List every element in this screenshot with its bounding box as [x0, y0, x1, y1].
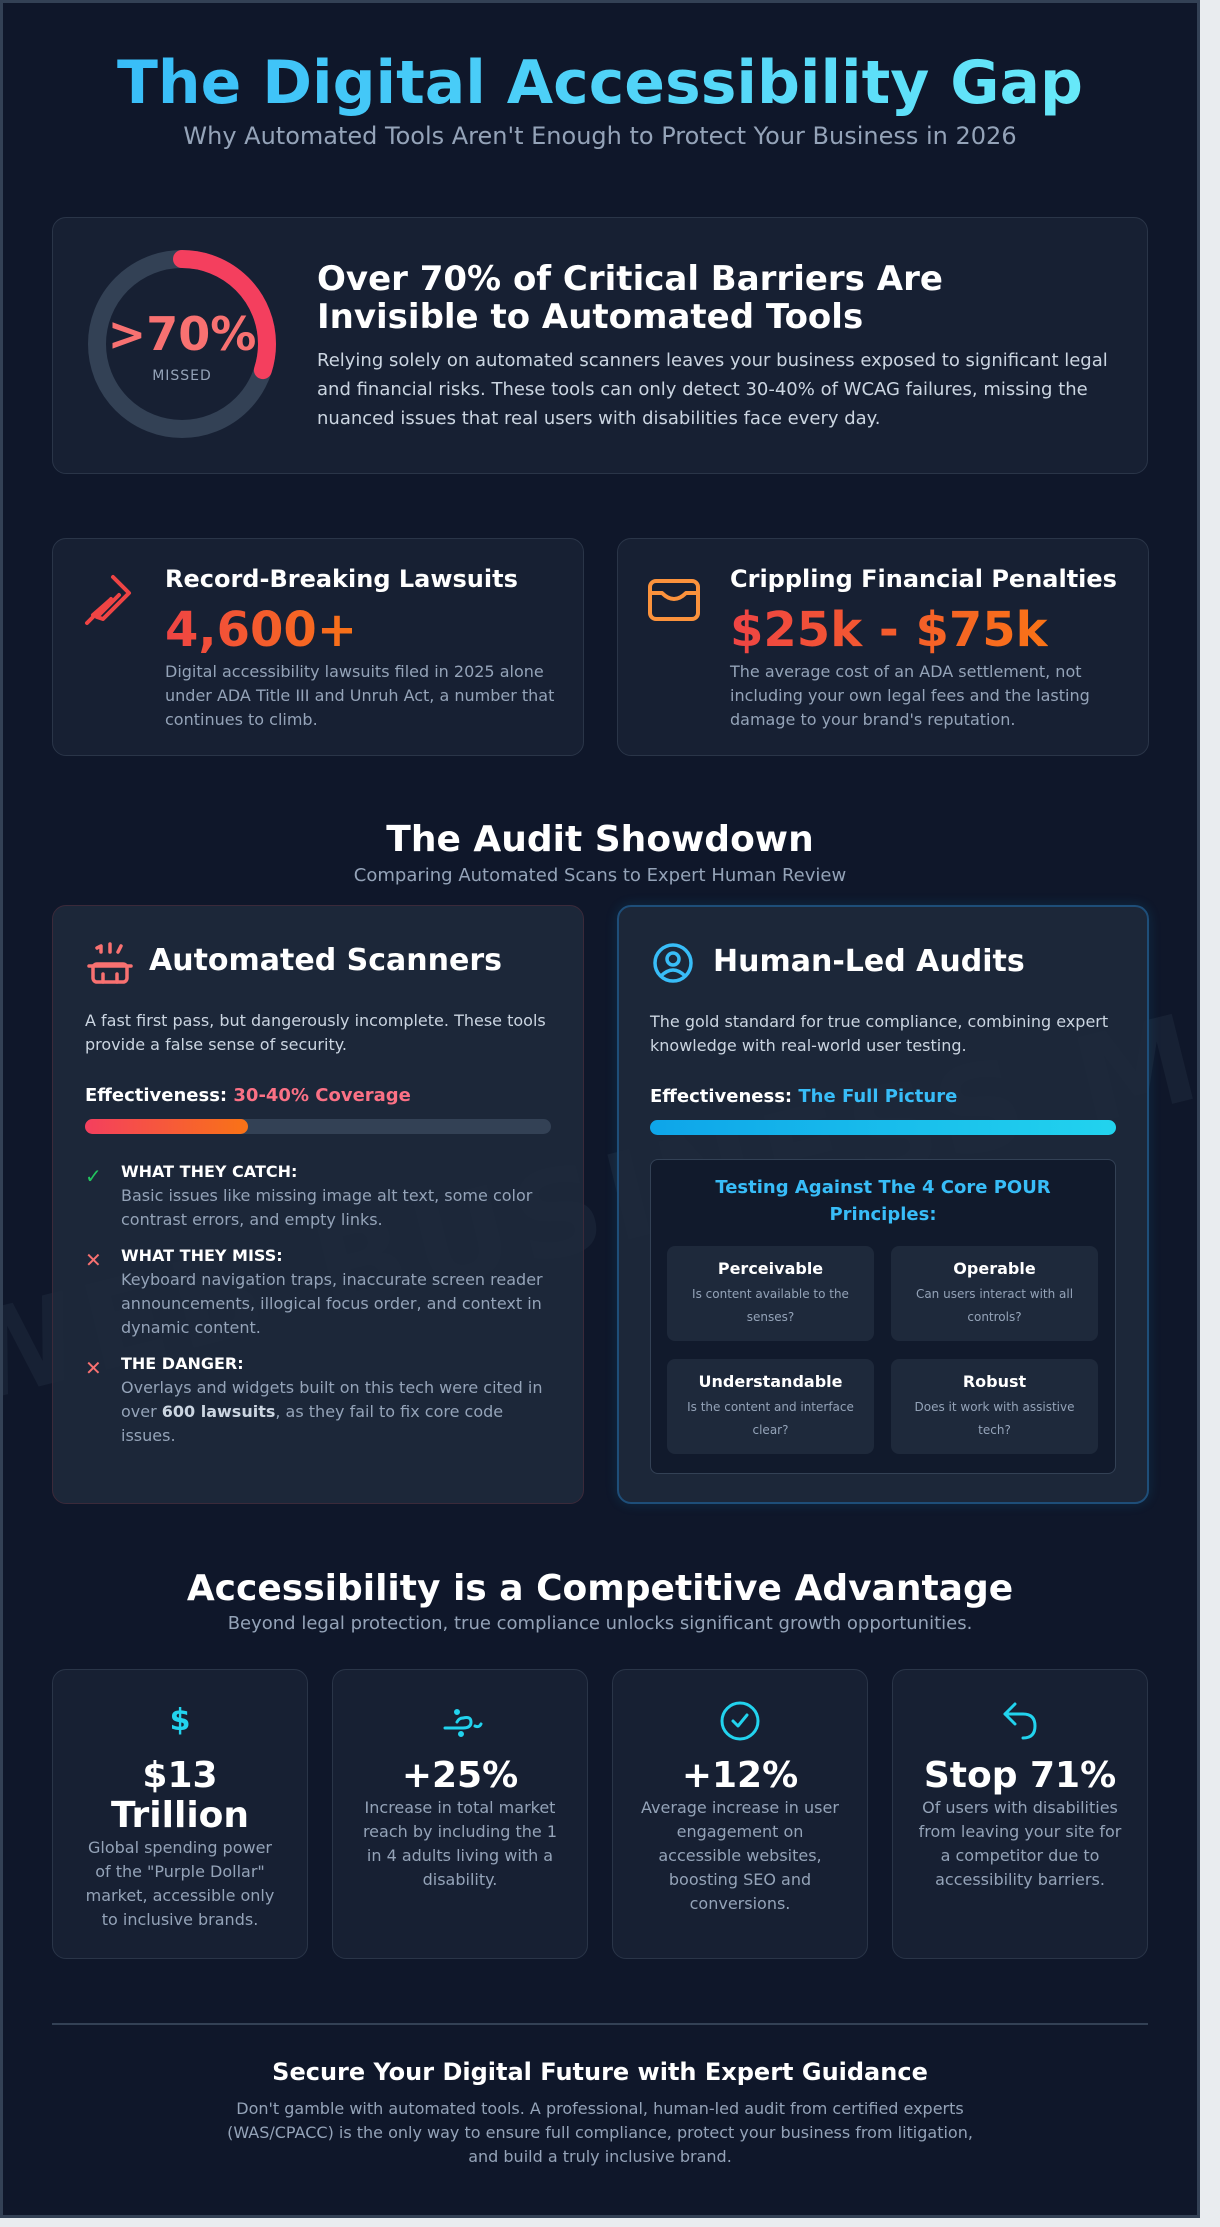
- penalties text: The average cost of an ADA settlement, not including your own legal fees and the lasting damage to your brand's reputation.: [730, 662, 1090, 729]
- list: the danger: Overlays and widgets built on this tech were cited in over 600 lawsuits, as they fail to fix core code issues.: [121, 1378, 542, 1445]
- panel: human-led audits: [617, 905, 1149, 1504]
- panel: hero stat: [52, 217, 1148, 474]
- icon: robot: [87, 942, 133, 984]
- hero heading: Over 70% of Critical Barriers Are: [317, 259, 943, 299]
- bar: scanners effectiveness: [85, 1119, 551, 1134]
- list: what they catch: Basic issues like missing image alt text, some color contrast errors, and empty links.: [121, 1186, 532, 1229]
- stat card: engagement: +12%: [682, 1755, 798, 1796]
- list: what they miss: WHAT THEY MISS:: [121, 1246, 283, 1265]
- lawsuits title: Record-Breaking Lawsuits: [165, 565, 518, 593]
- icon: return arrow: [1003, 1702, 1036, 1740]
- footer heading: Secure Your Digital Future with Expert Guidance: [272, 2058, 928, 2086]
- heading: competitive advantage: Accessibility is a Competitive Advantage: [187, 1568, 1013, 1609]
- icon: dollar: $: [170, 1703, 190, 1738]
- panel: POUR principles: [650, 1159, 1116, 1474]
- scanners effectiveness label: Effectiveness: 30-40% Coverage: [85, 1085, 411, 1106]
- hero heading: Invisible to Automated Tools: [317, 297, 863, 337]
- principle: operable: Can users interact with all controls?: [916, 1287, 1073, 1324]
- principle: robust: Robust: [963, 1372, 1026, 1391]
- list: what they catch: [85, 1162, 532, 1229]
- principle: perceivable: Is content available to the senses?: [692, 1287, 849, 1324]
- penalties title: Crippling Financial Penalties: [730, 565, 1117, 593]
- footer text: Don't gamble with automated tools. A professional, human-led audit from certified experts (WAS/CPACC) is the only way to ensure full compliance, protect your business from litigation, and build a truly inclusive brand.: [227, 2099, 973, 2166]
- stat card: engagement: Average increase in user engagement on accessible websites, boosting SEO and conversions.: [641, 1798, 839, 1913]
- subtitle: Why Automated Tools Aren't Enough to Protect Your Business in 2026: [183, 122, 1017, 150]
- principle: understandable: Understandable: [698, 1372, 842, 1391]
- stat card: purple dollar: Global spending power of the "Purple Dollar" market, accessible only to inclusive brands.: [86, 1838, 274, 1929]
- stat card: purple dollar: $13: [142, 1755, 218, 1796]
- stat card: engagement: [612, 1669, 868, 1959]
- list: the danger: THE DANGER:: [121, 1354, 244, 1373]
- principle: understandable: [667, 1359, 874, 1454]
- stat card: retention: [892, 1669, 1148, 1959]
- list: the danger: ✕: [85, 1356, 102, 1380]
- principle: robust: [891, 1359, 1098, 1454]
- panel: automated scanners: [52, 905, 584, 1504]
- panel: penalties: [617, 538, 1149, 756]
- principle: perceivable: Perceivable: [718, 1259, 823, 1278]
- hero text: Relying solely on automated scanners leaves your business exposed to significant legal and financial risks. These tools can only detect 30-40% of WCAG failures, missing the nuanced issues that real users with disabilities face every day.: [317, 350, 1108, 429]
- icon: wallet: [648, 579, 700, 621]
- icon: user circle: [653, 943, 693, 983]
- scanners title: Automated Scanners: [149, 943, 502, 978]
- stat card: retention: Of users with disabilities from leaving your site for a competitor due to accessibility barriers.: [919, 1798, 1121, 1889]
- principle: operable: Operable: [953, 1259, 1036, 1278]
- title: The Digital Accessibility Gap: [117, 48, 1083, 118]
- icon: people: [444, 1709, 483, 1737]
- human title: Human-Led Audits: [713, 944, 1025, 979]
- lawsuits text: Digital accessibility lawsuits filed in 2025 alone under ADA Title III and Unruh Act, a number that continues to climb.: [165, 662, 554, 729]
- POUR heading: Principles:: [829, 1204, 937, 1225]
- principle: operable: [891, 1246, 1098, 1341]
- stat card: retention: Stop 71%: [924, 1755, 1116, 1796]
- list: what they catch: WHAT THEY CATCH:: [121, 1162, 297, 1181]
- heading: audit showdown: The Audit Showdown: [386, 819, 814, 860]
- lawsuits number: 4,600+: [165, 602, 357, 658]
- human effectiveness label: Effectiveness: The Full Picture: [650, 1086, 957, 1107]
- list: the danger: [85, 1354, 542, 1445]
- POUR heading: [715, 1177, 1051, 1225]
- chart: donut 70% missed: [88, 250, 276, 438]
- principle: perceivable: [667, 1246, 874, 1341]
- stat card: market reach: +25%: [402, 1755, 518, 1796]
- human description: The gold standard for true compliance, combining expert knowledge with real-world user testing.: [650, 1012, 1108, 1055]
- icon: check circle: [720, 1702, 760, 1740]
- stat card: purple dollar: Trillion: [111, 1795, 249, 1836]
- principle: robust: Does it work with assistive tech?: [914, 1400, 1074, 1437]
- bar: human effectiveness: [650, 1120, 1116, 1135]
- icon: gavel: [84, 574, 132, 626]
- stat card: purple dollar: [52, 1669, 308, 1959]
- list: what they miss: ✕: [85, 1248, 102, 1272]
- chart: donut 70% missed: MISSED: [152, 368, 212, 384]
- stat card: market reach: Increase in total market reach by including the 1 in 4 adults living with a disability.: [363, 1798, 557, 1889]
- penalties number: $25k - $75k: [730, 602, 1048, 658]
- list: what they catch: ✓: [85, 1164, 102, 1188]
- subheading: audit showdown: Comparing Automated Scans to Expert Human Review: [354, 865, 846, 886]
- panel: lawsuits: [52, 538, 584, 756]
- list: what they miss: [85, 1246, 543, 1337]
- chart: donut 70% missed: >70%: [108, 307, 256, 361]
- stat card: market reach: [332, 1669, 588, 1959]
- scanners description: A fast first pass, but dangerously incomplete. These tools provide a false sense of security.: [85, 1011, 546, 1054]
- hero heading: [317, 259, 943, 337]
- POUR heading: Testing Against The 4 Core POUR: [715, 1177, 1051, 1198]
- subheading: competitive advantage: Beyond legal protection, true compliance unlocks significant growth opportunities.: [228, 1613, 972, 1634]
- principle: understandable: Is the content and interface clear?: [687, 1400, 854, 1437]
- list: what they miss: Keyboard navigation traps, inaccurate screen reader announcements, illogical focus order, and context in dynamic content.: [121, 1270, 543, 1337]
